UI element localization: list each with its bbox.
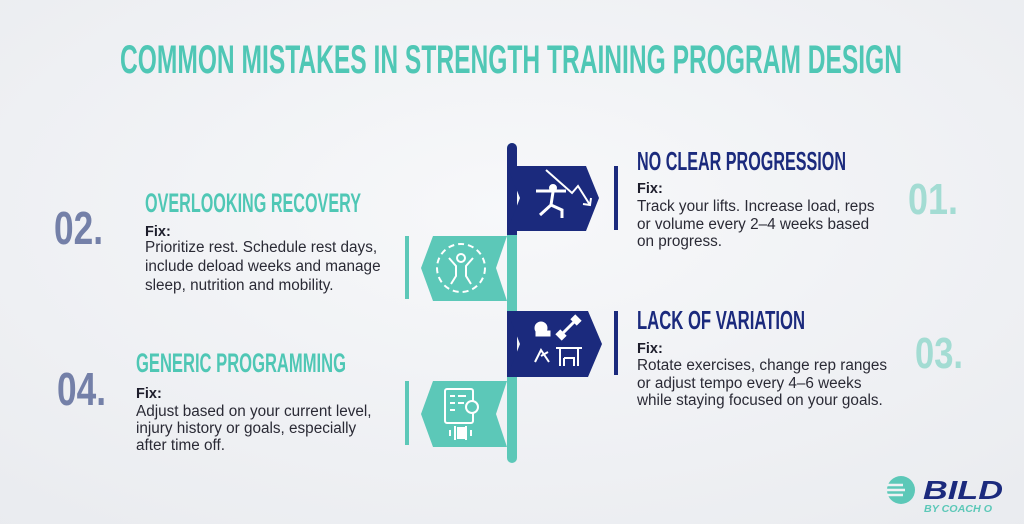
flag 3: lack of variation icon xyxy=(507,311,602,377)
item 04 text xyxy=(136,348,372,454)
item 03 text: Fix: xyxy=(637,341,663,357)
number 04: 04. xyxy=(57,363,106,415)
item 01 text: Track your lifts. Increase load, reps xyxy=(637,198,875,215)
item 02 text: Prioritize rest. Schedule rest days, xyxy=(145,239,377,256)
timeline pole xyxy=(507,143,517,463)
item 04 text: Adjust based on your current level, xyxy=(136,403,372,420)
item 03 text: Rotate exercises, change rep ranges xyxy=(637,357,887,374)
number 03: 03. xyxy=(915,329,963,378)
item 02 text xyxy=(145,188,381,294)
item 02 text: OVERLOOKING RECOVERY xyxy=(145,188,361,218)
logo: BY COACH O xyxy=(924,504,992,515)
item 04 text: Fix: xyxy=(136,386,162,402)
icon: figure with falling arrow xyxy=(536,170,591,218)
item 04 text: GENERIC PROGRAMMING xyxy=(136,348,346,378)
bar: item 3 xyxy=(614,311,618,375)
number 02: 02. xyxy=(54,202,103,254)
item 03 text: or adjust tempo every 4–6 weeks xyxy=(637,375,862,392)
icon: clipboard xyxy=(445,389,478,440)
bar: item 1 xyxy=(614,166,618,230)
icon: body recovery xyxy=(437,244,485,292)
item 01 text: on progress. xyxy=(637,233,722,250)
number 01: 01. xyxy=(908,175,958,224)
flag 2: overlooking recovery icon xyxy=(421,236,507,301)
item 02 text: include deload weeks and manage xyxy=(145,258,381,275)
flag 4: generic programming icon xyxy=(421,381,507,447)
item 02 text: sleep, nutrition and mobility. xyxy=(145,277,333,294)
item 04 text: injury history or goals, especially xyxy=(136,420,357,437)
item 02 text: Fix: xyxy=(145,224,171,240)
item 03 text xyxy=(636,305,887,409)
item 01 text: Fix: xyxy=(637,181,663,197)
logo xyxy=(887,475,1003,515)
item 01 text: or volume every 2–4 weeks based xyxy=(637,216,869,233)
flag 1: no clear progression icon xyxy=(507,166,599,231)
icon: gym equipment xyxy=(535,315,582,366)
item 04 text: after time off. xyxy=(136,437,225,454)
bar: item 4 xyxy=(405,381,409,445)
item 03 text: while staying focused on your goals. xyxy=(636,392,883,409)
item 01 text xyxy=(637,146,875,250)
logo: BILD xyxy=(923,475,1003,505)
bar: item 2 xyxy=(405,236,409,299)
item 03 text: LACK OF VARIATION xyxy=(637,305,805,335)
item 01 text: NO CLEAR PROGRESSION xyxy=(637,146,846,176)
